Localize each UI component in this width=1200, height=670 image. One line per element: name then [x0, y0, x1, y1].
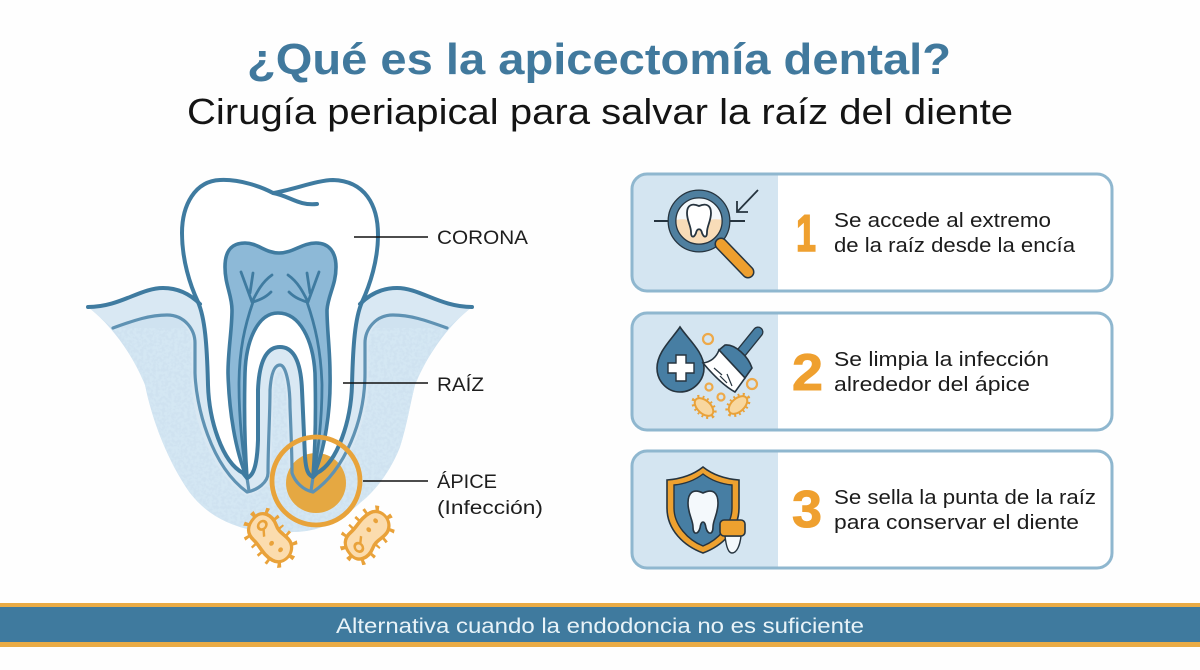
infection ring — [272, 437, 360, 525]
label: ápice — [363, 472, 543, 519]
panel: step 1 — [632, 174, 1112, 291]
icon: shield with tooth and seal — [667, 467, 745, 553]
step text 3 — [834, 487, 1096, 534]
icon tile — [632, 451, 778, 568]
tooth anatomy diagram — [88, 180, 472, 567]
label: ápice: ÁPICE — [437, 472, 497, 493]
infection area — [286, 453, 346, 513]
card border — [632, 313, 1112, 430]
step text 3: para conservar el diente — [834, 512, 1079, 534]
subtitle: Cirugía periapical para salvar la raíz del diente — [187, 91, 1013, 132]
label: ápice: (Infección) — [437, 498, 543, 519]
step text 2: Se limpia la infección — [834, 349, 1049, 371]
step number 2: 2 — [792, 344, 823, 402]
icon: drop and brush — [657, 327, 758, 419]
card background — [632, 451, 1112, 568]
icon tile — [632, 174, 778, 291]
panel: step 3 — [632, 451, 1112, 568]
tooth body — [182, 180, 378, 478]
step text 2: alrededor del ápice — [834, 374, 1030, 396]
footer banner — [0, 603, 1200, 647]
card background — [632, 174, 1112, 291]
step text 3: Se sella la punta de la raíz — [834, 487, 1096, 509]
step number 1: 1 — [796, 205, 816, 263]
step text 2 — [834, 349, 1049, 396]
bacteria right — [338, 506, 397, 564]
step text 1: de la raíz desde la encía — [834, 235, 1076, 257]
label: corona: CORONA — [437, 228, 528, 249]
label: raíz: RAÍZ — [437, 375, 484, 396]
title: ¿Qué es la apicectomía dental? — [247, 35, 951, 84]
card border — [632, 451, 1112, 568]
step text 1 — [834, 210, 1076, 257]
icon: magnifier over tooth — [654, 190, 758, 272]
step text 1: Se accede al extremo — [834, 210, 1051, 232]
card border — [632, 174, 1112, 291]
pulp chamber and canals — [225, 243, 336, 478]
periodontal lines — [113, 315, 447, 492]
panel: step 2 — [632, 313, 1112, 430]
footer banner: Alternativa cuando la endodoncia no es suficiente — [336, 615, 864, 638]
bacteria left — [241, 509, 300, 567]
card background — [632, 313, 1112, 430]
step number 3: 3 — [792, 481, 822, 539]
gum and bone — [88, 285, 472, 535]
icon tile — [632, 313, 778, 430]
tooth outline — [88, 180, 472, 478]
